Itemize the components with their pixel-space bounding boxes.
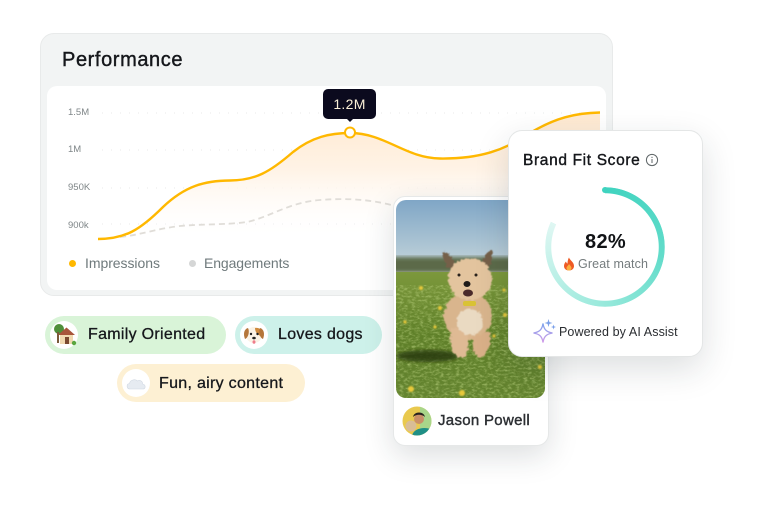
tag: Family Oriented [45, 316, 226, 354]
panel: performance [40, 33, 613, 296]
icon: sparkle [533, 319, 556, 343]
avatar [402, 406, 432, 436]
progress ring [545, 187, 665, 307]
photo: dog running on grass [396, 200, 545, 398]
icon: house with tree [54, 324, 76, 346]
name: Jason Powell: Jason Powell [438, 412, 530, 429]
icon: cloud [126, 379, 146, 390]
card: brand fit score [508, 130, 703, 357]
tag: Family Oriented: Family Oriented [88, 326, 205, 343]
tag: Fun, airy content: Fun, airy content [159, 375, 283, 392]
axis labels [68, 106, 90, 230]
score: 82%: 82% [585, 231, 626, 253]
legend item: engagements: Engagements [204, 255, 289, 271]
legend [69, 255, 289, 271]
card: creator [393, 196, 549, 446]
tooltip: 1.2M: 1.2M [333, 96, 366, 112]
line chart [98, 111, 600, 240]
icon: fire [564, 258, 574, 270]
axis labels: 950K [68, 182, 90, 192]
axis labels: 900k [68, 220, 89, 230]
icon: info [646, 154, 658, 166]
label: great match: Great match [578, 257, 648, 271]
heading: Brand Fit Score: Brand Fit Score [523, 152, 640, 169]
tag: Loves dogs [235, 316, 382, 354]
icon: dog face [244, 327, 264, 344]
tooltip: 1.2M [323, 89, 376, 119]
heading: Performance: Performance [62, 49, 183, 71]
legend item: impressions: Impressions [85, 255, 160, 271]
tag: Fun, airy content [117, 364, 305, 402]
tag: Loves dogs: Loves dogs [278, 326, 363, 343]
chart area [47, 86, 606, 290]
powered by AI Assist: Powered by AI Assist [559, 325, 678, 339]
axis labels: 1M [68, 144, 81, 154]
powered by AI Assist [533, 319, 678, 343]
axis labels: 1.5M [68, 106, 89, 118]
